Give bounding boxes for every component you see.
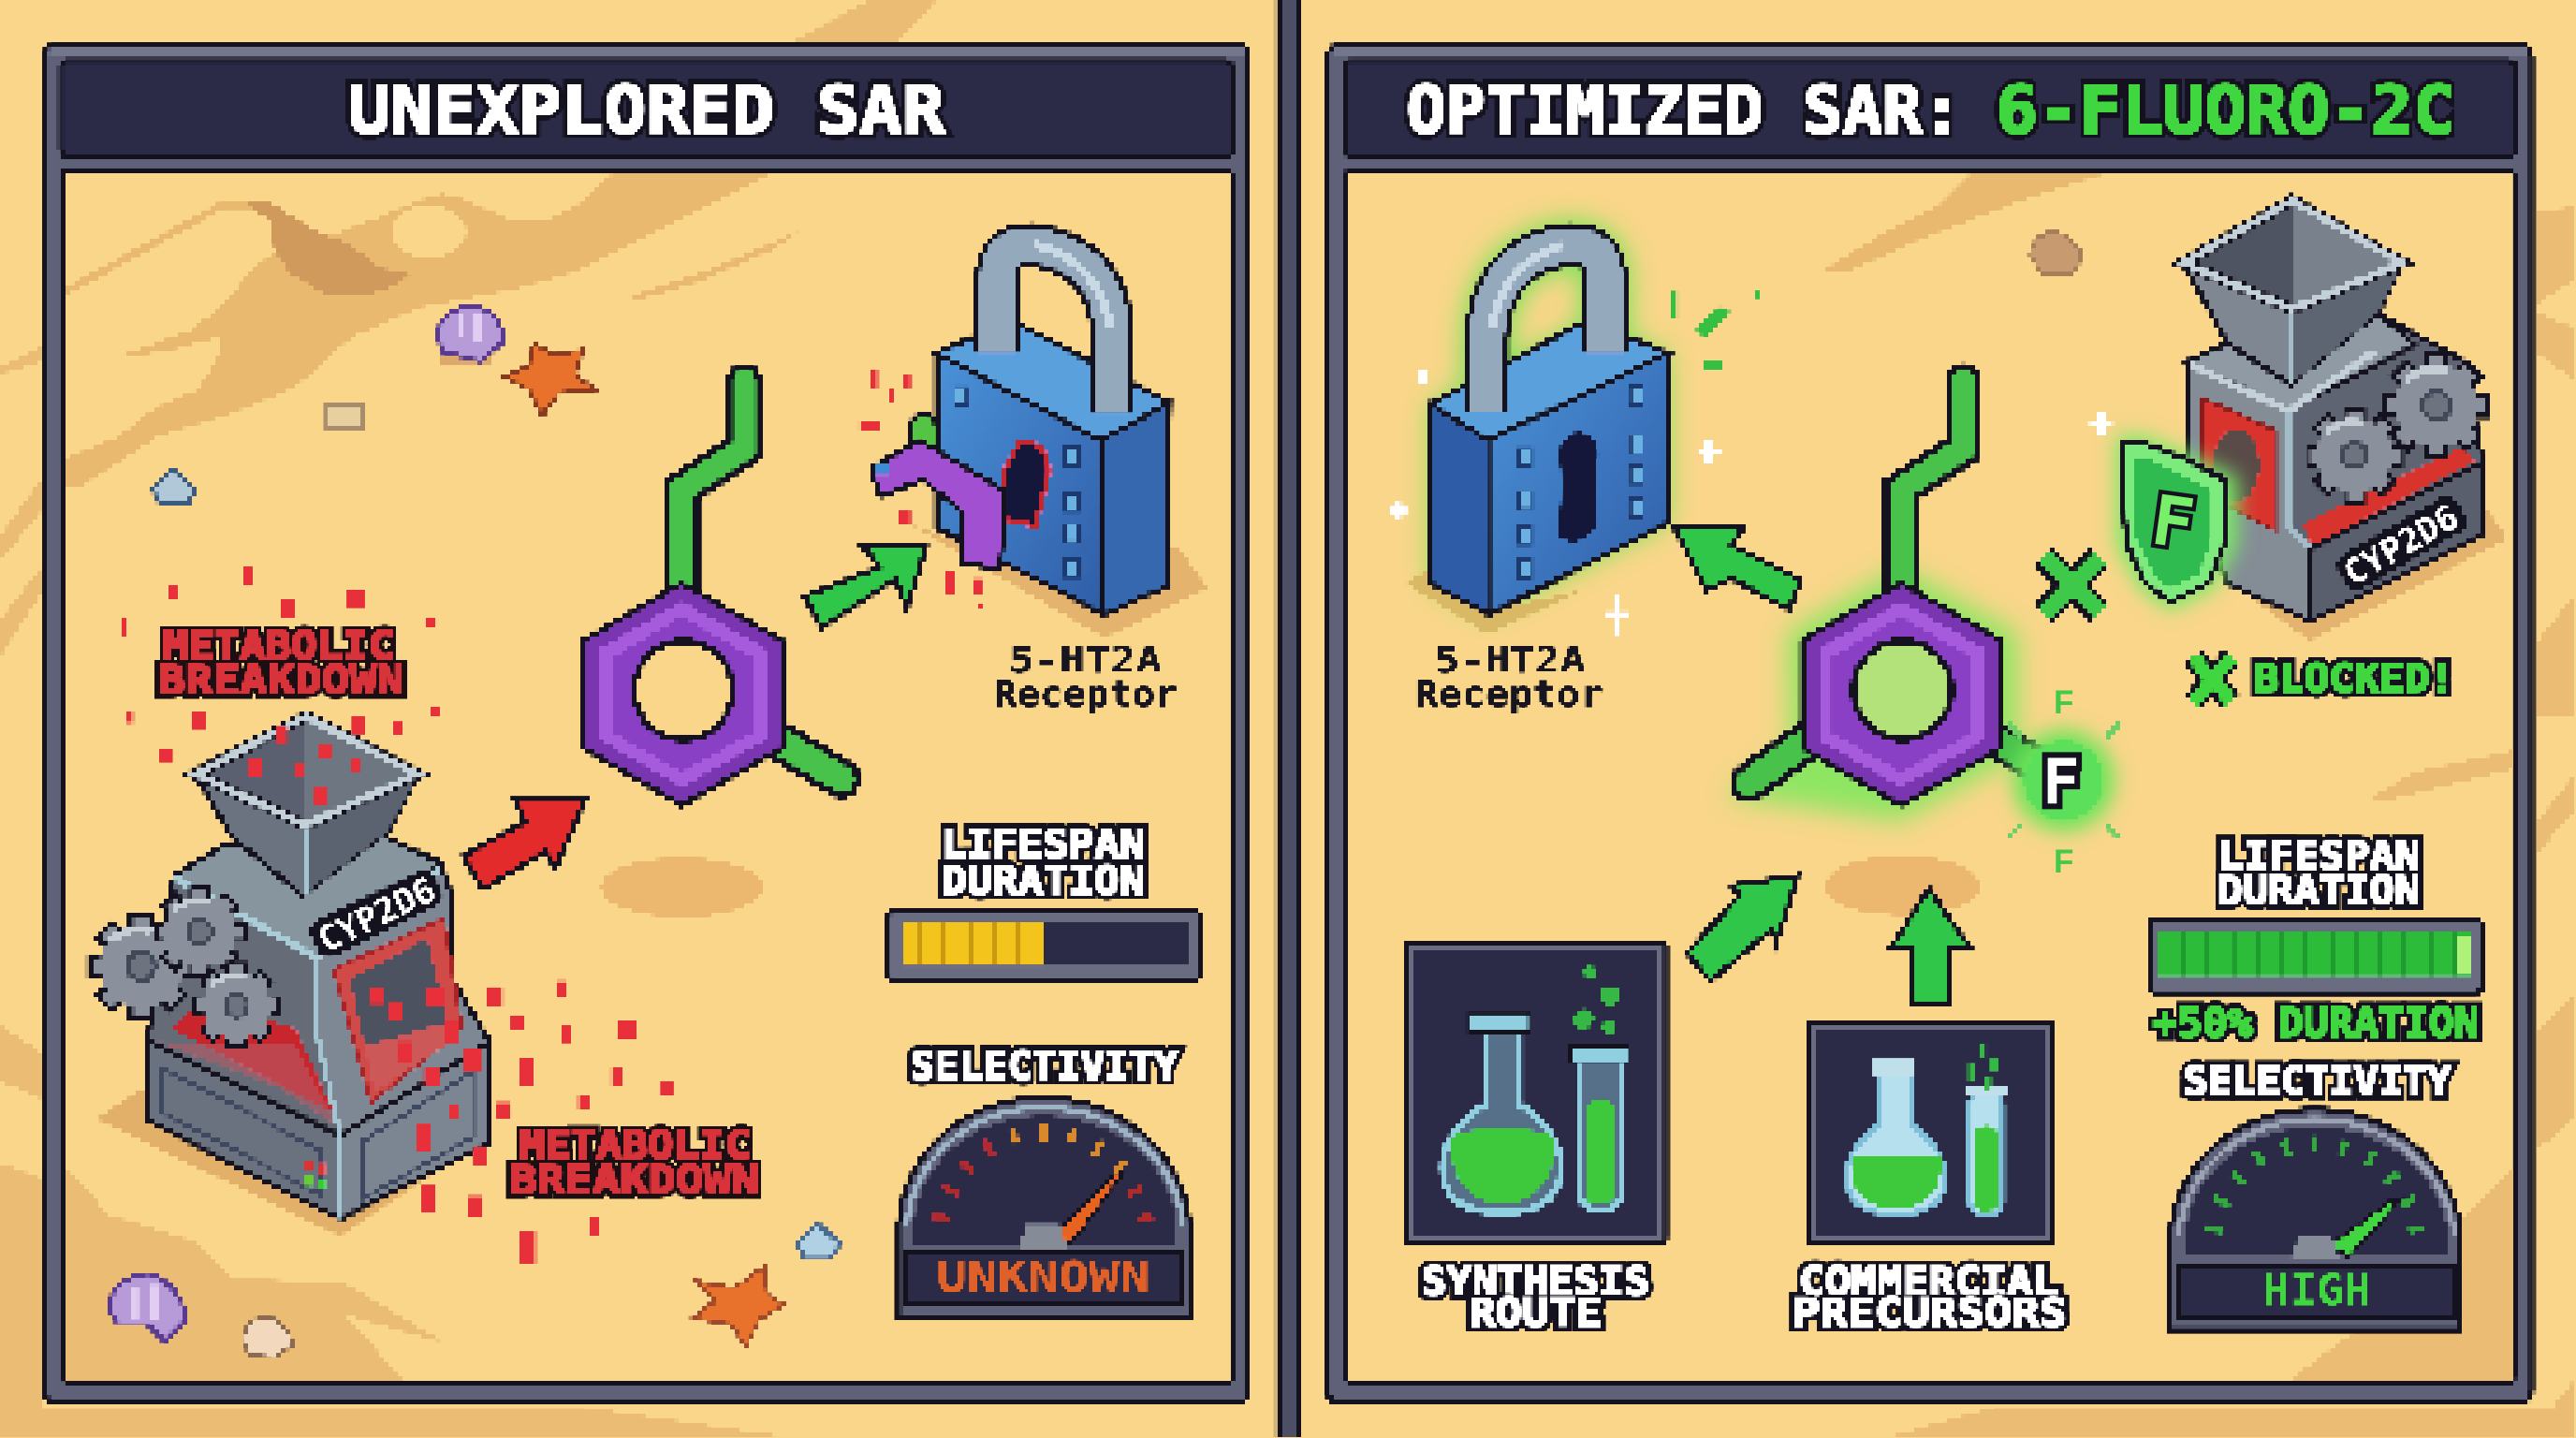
- padlock receptor right: [1390, 245, 2113, 635]
- label: CYP2D6 left: CYP2D6: [312, 870, 442, 961]
- icon: synthesis route flasks: [1405, 942, 1666, 1242]
- label: lifespan duration right: DURATION: [2218, 867, 2420, 913]
- molecule glow: [1725, 567, 2017, 822]
- label: 5-HT2A receptor right: Receptor: [1414, 674, 1603, 716]
- fluorine atom: [2008, 723, 2119, 838]
- panel frame left: [44, 44, 1249, 1403]
- padlock glow: [1431, 245, 1668, 614]
- panel: optimized SAR: [1327, 44, 2532, 1403]
- label: lifespan duration left: [942, 821, 1145, 903]
- label: plus 50 percent duration: +50% DURATION: [2152, 1000, 2480, 1048]
- label: 5-HT2A receptor left: [994, 639, 1178, 716]
- padlock receptor left: [859, 245, 1208, 638]
- center divider: [1279, 0, 1298, 1438]
- dunes left: [66, 174, 798, 1380]
- icon: blocked x: [2193, 657, 2232, 701]
- machine: CYP2D6 grinder right: [2184, 200, 2507, 641]
- label: lifespan duration left: LIFESPAN: [942, 821, 1145, 867]
- arrow: precursors to molecule: [1891, 889, 1969, 1004]
- label: selectivity left: SELECTIVITY: [910, 1043, 1178, 1089]
- label: synthesis route: SYNTHESIS: [1421, 1258, 1649, 1304]
- fluorine letters: F: [2054, 684, 2073, 721]
- label: metabolic breakdown upper: METABOLIC: [163, 623, 394, 668]
- red fragments: [120, 565, 672, 1266]
- lifespan bar right: [2149, 920, 2482, 992]
- label: commercial precursors: [1793, 1258, 2067, 1335]
- molecule right: [1749, 381, 2045, 805]
- fluorine letters: F: [2054, 844, 2073, 880]
- label: commercial precursors: PRECURSORS: [1793, 1289, 2067, 1335]
- label: blocked: BLOCKED!: [2254, 655, 2454, 701]
- molecule left: [583, 381, 842, 805]
- selectivity gauge left: [899, 1097, 1190, 1319]
- icon: commercial precursors flasks: [1808, 1022, 2054, 1242]
- gauge value: high: HIGH: [2262, 1266, 2371, 1315]
- shield letter F: F: [2147, 481, 2199, 565]
- label: metabolic breakdown lower: METABOLIC: [520, 1122, 751, 1167]
- arrow: red to molecule: [463, 800, 585, 889]
- label: lifespan duration left: DURATION: [942, 858, 1145, 903]
- panel: unexplored SAR: [44, 44, 1249, 1403]
- title right: 6-FLUORO-2C: [1997, 72, 2454, 149]
- label: lifespan duration right: LIFESPAN: [2218, 833, 2420, 879]
- label: synthesis route: [1421, 1258, 1649, 1335]
- fluorine letters: [2042, 684, 2080, 880]
- label: synthesis route: ROUTE: [1469, 1289, 1602, 1335]
- icon: green x block: [2043, 557, 2100, 613]
- arrow: green to receptor: [805, 544, 927, 627]
- selectivity gauge right: [2171, 1109, 2461, 1329]
- label: metabolic breakdown upper: [157, 623, 404, 703]
- fluorine atom glow: [2012, 729, 2115, 831]
- fluorine letters: F: [2042, 745, 2080, 818]
- arrow: green to receptor right: [1675, 527, 1801, 609]
- dunes right: [1822, 174, 2512, 1380]
- machine: CYP2D6 grinder left: [90, 716, 493, 1236]
- title right: [1406, 72, 2454, 149]
- label: 5-HT2A receptor left: Receptor: [994, 674, 1178, 716]
- label: lifespan duration right: [2218, 833, 2420, 913]
- panel frame right: [1327, 44, 2532, 1403]
- label: CYP2D6 right: CYP2D6: [2337, 496, 2466, 594]
- label: metabolic breakdown lower: BREAKDOWN: [509, 1156, 759, 1202]
- label: 5-HT2A receptor right: 5-HT2A: [1434, 639, 1586, 682]
- decorative shells left: [109, 305, 840, 1357]
- label: metabolic breakdown lower: [509, 1122, 759, 1202]
- shield glow: [2116, 435, 2238, 611]
- label: 5-HT2A receptor left: 5-HT2A: [1009, 639, 1162, 682]
- lifespan bar left: [889, 910, 1199, 981]
- label: 5-HT2A receptor right: [1414, 639, 1603, 716]
- gauge value: unknown: UNKNOWN: [936, 1253, 1150, 1302]
- label: selectivity right: SELECTIVITY: [2184, 1058, 2452, 1104]
- icon: fluorine shield: [2121, 444, 2225, 601]
- title right: OPTIMIZED SAR:: [1406, 72, 1962, 149]
- label: commercial precursors: COMMERCIAL: [1799, 1258, 2058, 1304]
- title left: UNEXPLORED SAR: [348, 72, 945, 149]
- label: metabolic breakdown upper: BREAKDOWN: [157, 657, 404, 703]
- arrow: synthesis to molecule: [1688, 876, 1797, 981]
